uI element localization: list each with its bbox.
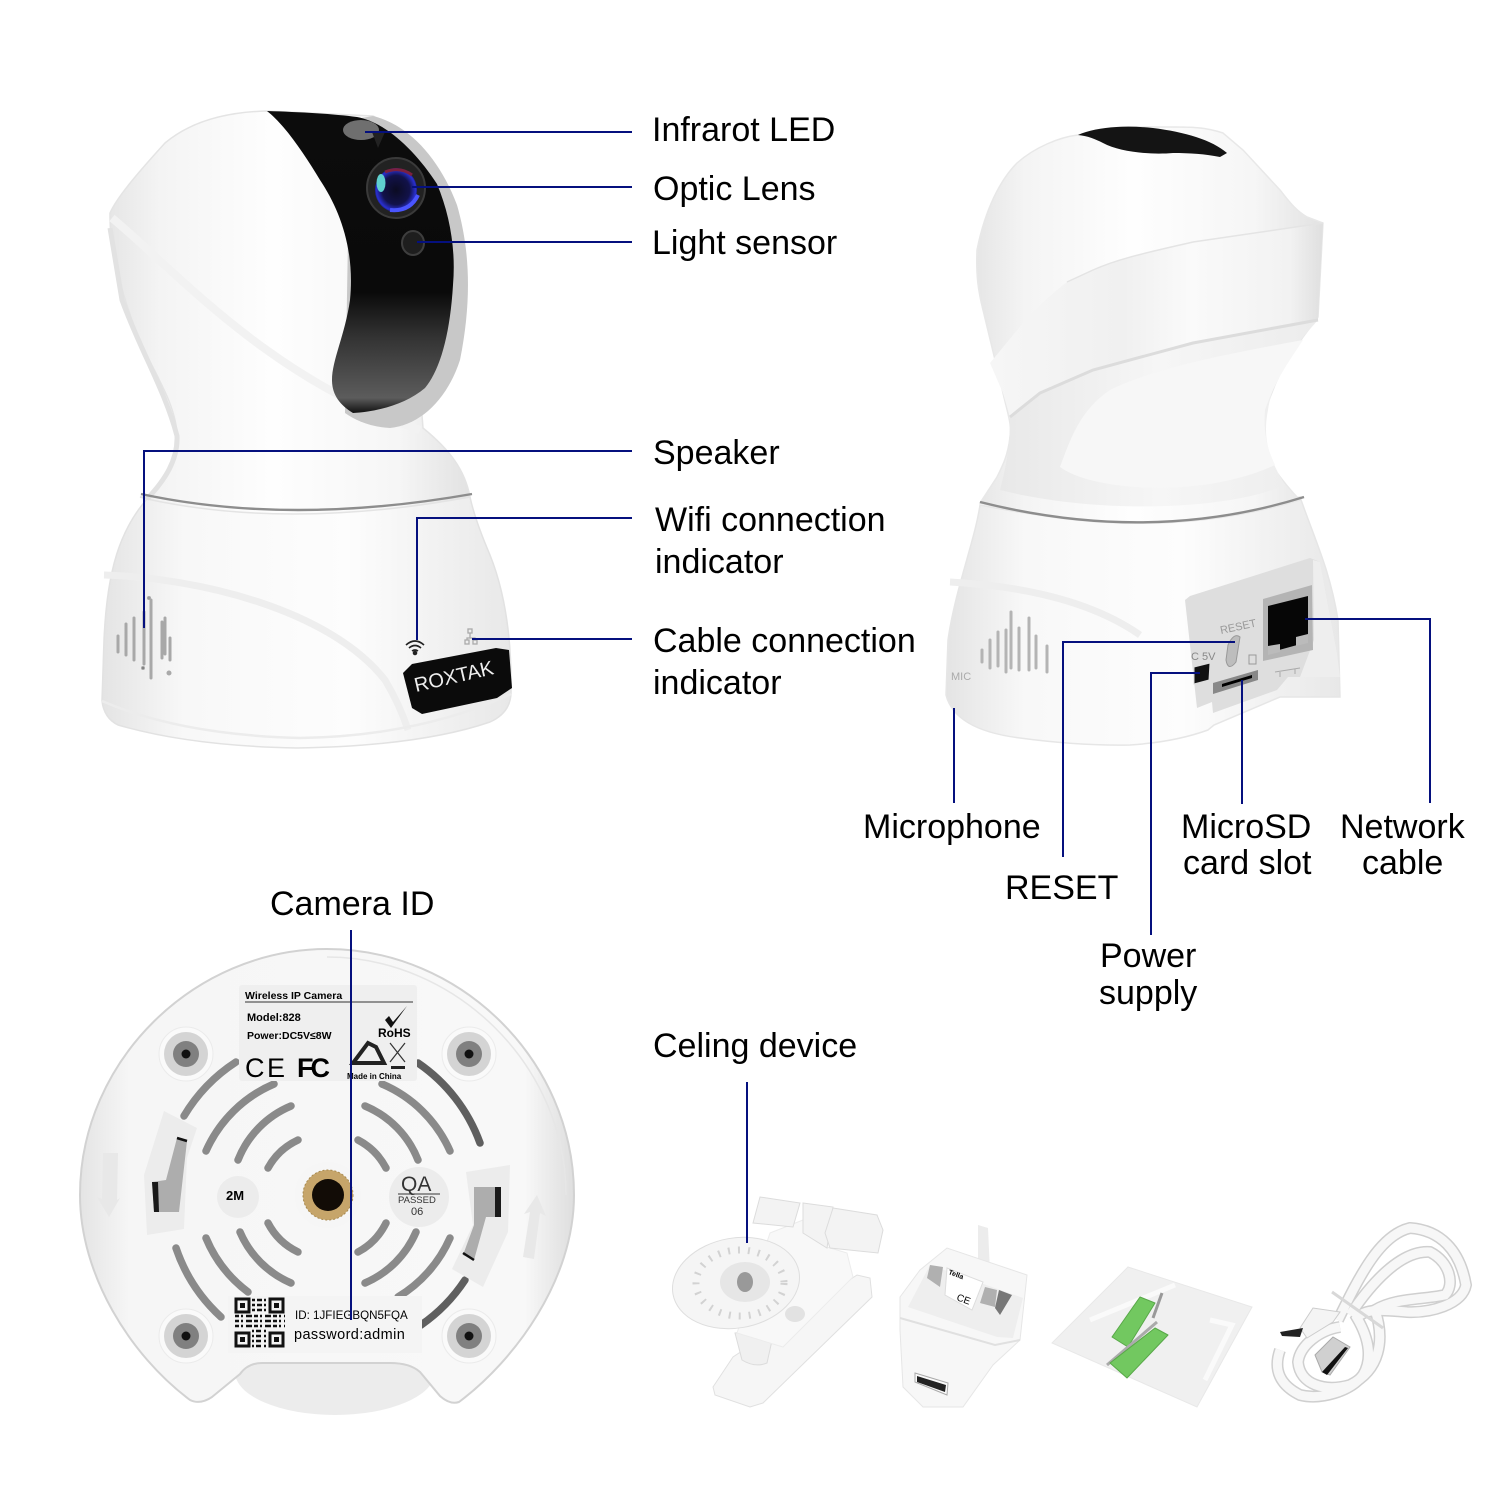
- spec sticker: Made in China: [347, 1072, 402, 1081]
- leader line: Power supply: [1151, 673, 1200, 935]
- spec sticker: [239, 985, 417, 1083]
- 2M badge: 2M: [226, 1188, 244, 1203]
- spec sticker: Model:828: [247, 1012, 301, 1024]
- power port: C 5V: [1191, 651, 1216, 663]
- mount post: [735, 1327, 775, 1365]
- panel: wall anchors packet: [1052, 1267, 1252, 1407]
- panel: camera back view: [946, 127, 1340, 745]
- grey rim: [345, 116, 468, 428]
- label: RESET: RESET: [1005, 869, 1118, 907]
- panel: ceiling mount accessory: [665, 1197, 883, 1407]
- ID sticker: password:admin: [294, 1327, 405, 1343]
- spec sticker: Power:DC5V≤8W: [247, 1030, 332, 1042]
- panel: power adapter accessory: CE: [955, 1292, 972, 1308]
- panel: USB cable accessory: [1277, 1228, 1466, 1396]
- leader line: RESET: [1063, 642, 1235, 857]
- QA passed badge: PASSED: [398, 1195, 436, 1206]
- port panel: [1185, 558, 1340, 713]
- leader line: Optic Lens: [412, 186, 632, 188]
- label: Infrarot LED: Infrarot LED: [652, 111, 835, 149]
- ROXTAK badge: ROXTAK: [412, 657, 496, 697]
- label: Network cable: Network: [1340, 808, 1465, 846]
- spec sticker: E: [267, 1053, 285, 1083]
- ID sticker: ID: 1JFIEGBQN5FQA: [295, 1309, 408, 1322]
- panel: power adapter accessory: [900, 1225, 1027, 1407]
- label: Speaker: Speaker: [653, 434, 780, 472]
- 2M badge: [217, 1176, 259, 1218]
- leader line: Celing device: [746, 1082, 748, 1243]
- label: Cable connection indicator: Cable connection: [653, 622, 916, 660]
- leader line: Infrarot LED: [365, 131, 632, 133]
- neck shading: [1000, 320, 1318, 506]
- label: Network cable: cable: [1362, 844, 1443, 882]
- rotate arrow left: [97, 1153, 120, 1217]
- power port: [1191, 651, 1216, 684]
- leader line: Camera ID: [350, 930, 352, 1320]
- RESET button: RESET: [1219, 618, 1258, 637]
- screw feet: [159, 1027, 496, 1363]
- label: Wifi connection indicator: indicator: [655, 543, 784, 581]
- spec sticker: Wireless IP Camera: [245, 990, 342, 1002]
- infrared LED: [343, 120, 385, 148]
- leader line: Light sensor: [417, 241, 632, 243]
- neck seam: [141, 494, 472, 510]
- label: MicroSD card slot: MicroSD: [1181, 808, 1311, 846]
- QR code: [235, 1299, 285, 1346]
- MIC marking: MIC: [951, 671, 971, 683]
- QA passed badge: QA: [401, 1173, 431, 1196]
- network port: [1263, 585, 1313, 677]
- leader line: Speaker: [144, 451, 632, 628]
- mount arm: [737, 1220, 853, 1347]
- back speaker grille: [982, 612, 1047, 672]
- panel: camera front view: [102, 111, 512, 748]
- rotate arrow right: [523, 1195, 546, 1259]
- label: MicroSD card slot: card slot: [1183, 844, 1312, 882]
- spec sticker: C: [245, 1053, 264, 1083]
- label: Celing device: Celing device: [653, 1027, 857, 1065]
- label: Optic Lens: Optic Lens: [653, 170, 816, 208]
- mounting screw socket: [295, 1162, 361, 1228]
- black camera face: [267, 111, 454, 413]
- top dark crescent: [1078, 127, 1227, 157]
- mount knobs: [753, 1197, 883, 1253]
- back body: [946, 127, 1340, 745]
- spec sticker: FC: [297, 1053, 329, 1083]
- cable indicator icon: [465, 629, 477, 644]
- mount disc: [665, 1228, 807, 1338]
- leader line: Microphone: [953, 708, 955, 803]
- leader line: Cable connection: [472, 638, 632, 640]
- label: Microphone: Microphone: [863, 808, 1041, 846]
- light sensor: [402, 231, 424, 255]
- microSD slot: [1213, 655, 1258, 694]
- ROXTAK badge: [403, 648, 512, 714]
- camera front body: [102, 111, 511, 748]
- underside disc: [80, 949, 574, 1415]
- QA passed badge: 06: [411, 1206, 423, 1218]
- optic lens: [367, 158, 425, 218]
- QA passed badge: [389, 1167, 449, 1227]
- label: Light sensor: Light sensor: [652, 224, 837, 262]
- label: Camera ID: Camera ID: [270, 885, 434, 923]
- leader line: Wifi connection: [417, 518, 632, 640]
- mount base: [713, 1275, 872, 1407]
- label: Power supply: supply: [1099, 974, 1197, 1012]
- right clip: [452, 1165, 510, 1287]
- wifi indicator icon: [406, 641, 424, 654]
- leader line: Network cable: [1305, 619, 1430, 803]
- panel: power adapter accessory: Tella: [947, 1269, 964, 1281]
- label: Wifi connection indicator: Wifi connection: [655, 501, 886, 539]
- ribbon band: [990, 223, 1323, 417]
- ID sticker: [228, 1296, 422, 1353]
- spec sticker: RoHS: [378, 1026, 411, 1040]
- left clip: [144, 1111, 197, 1235]
- label: Power supply: Power: [1100, 937, 1196, 975]
- speaker grille: [118, 596, 171, 678]
- RESET button: [1219, 618, 1258, 667]
- ventilation slots: [176, 1062, 480, 1325]
- leader line: MicroSD: [1241, 680, 1243, 804]
- label: Cable connection indicator: indicator: [653, 664, 782, 702]
- panel: camera underside: [80, 949, 574, 1415]
